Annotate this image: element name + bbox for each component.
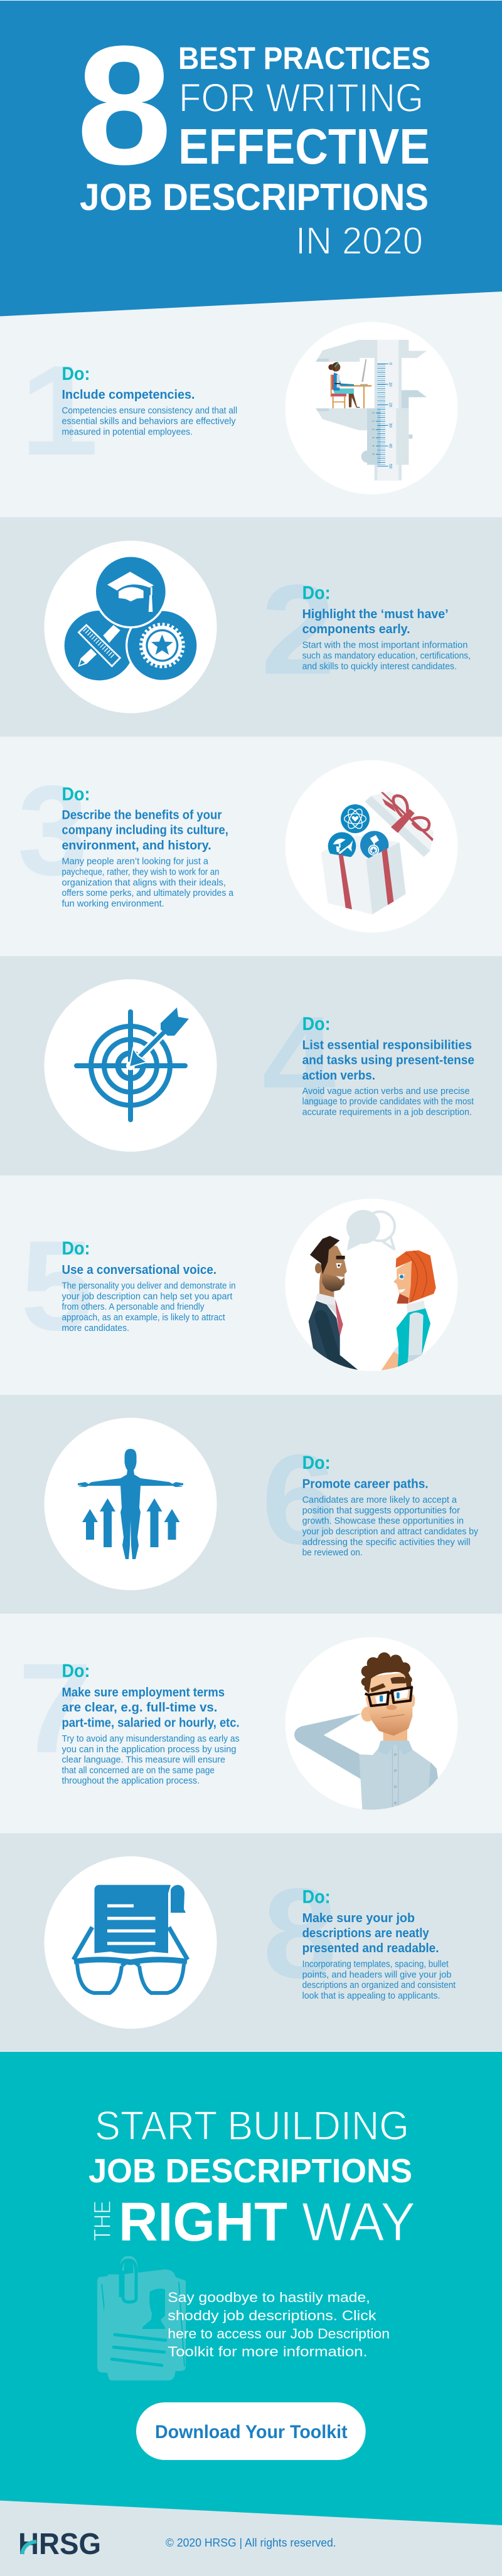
icon: white circle with person and upward arrows	[44, 1418, 217, 1590]
icon: white circle with open gift box	[285, 760, 458, 933]
panel: practice 4	[0, 956, 502, 1175]
big number 6: 6	[262, 1428, 336, 1571]
panel: practice 5	[25, 1199, 458, 1371]
heading 2: Highlight the ‘must have’	[302, 607, 449, 621]
heading 8: descriptions are neatly	[302, 1926, 429, 1940]
body 5: from others. A personable and friendly	[61, 1302, 205, 1312]
do label 7: Do:	[61, 1661, 90, 1681]
icon: white circle with caliper and woman at desk: 30	[388, 423, 392, 428]
heading 7: part-time, salaried or hourly, etc.	[61, 1715, 240, 1730]
body 2: such as mandatory education, certifications,	[302, 651, 471, 661]
body 6: position that suggests opportunities for	[302, 1506, 460, 1516]
cta line: job descriptions: JOB DESCRIPTIONS	[88, 2152, 412, 2190]
big number 5: 5	[21, 1214, 93, 1357]
footer background	[0, 2495, 502, 2576]
title	[77, 11, 430, 262]
cta line: start building: START BUILDING	[95, 2103, 409, 2148]
body 8: points, and headers will give your job	[302, 1970, 451, 1980]
body 6: your job description and attract candidates by	[302, 1527, 479, 1537]
title numeral 8: 8	[77, 11, 172, 200]
body 1: essential skills and behaviors are effectively	[61, 416, 236, 426]
body 3: Many people aren’t looking for just a	[61, 856, 209, 866]
cta body text: Toolkit for more information.	[168, 2343, 368, 2360]
body 7: Try to avoid any misunderstanding as early as	[61, 1734, 240, 1744]
body 5: more candidates.	[61, 1323, 129, 1333]
title line: in 2020: IN 2020	[296, 219, 423, 262]
heading 8	[302, 1911, 439, 1955]
cta body text: here to access our Job Description	[168, 2326, 390, 2342]
body 8	[302, 1959, 456, 2001]
title line: job descriptions: JOB DESCRIPTIONS	[80, 176, 429, 218]
cta body text: shoddy job descriptions. Click	[168, 2308, 377, 2323]
heading 4	[302, 1038, 474, 1083]
body 2	[302, 641, 471, 672]
body 7	[61, 1734, 240, 1786]
panel: call to action	[0, 2052, 502, 2525]
logo: HRSG: HRSG	[18, 2528, 101, 2561]
do label 4: Do:	[302, 1014, 331, 1034]
heading 3	[61, 808, 228, 853]
heading 1: Include competencies.	[61, 387, 195, 402]
panel: practice 6	[0, 1395, 502, 1614]
header banner background	[0, 1, 502, 316]
icon: white circle with caliper and woman at desk: 50	[388, 464, 392, 469]
big number 8: 8	[263, 1862, 337, 2005]
cta word: the (vertical): THE	[90, 2200, 116, 2241]
cta word: right: RIGHT	[119, 2192, 287, 2253]
body 7: clear language. This measure will ensure	[61, 1755, 225, 1765]
heading 8: presented and readable.	[302, 1941, 439, 1955]
heading 4: List essential responsibilities	[302, 1038, 472, 1053]
title line: for writing: FOR WRITING	[179, 75, 424, 120]
icon: white circle with thinking man in glasses	[285, 1638, 458, 1810]
heading 3: environment, and history.	[61, 838, 211, 853]
icon: white circle with caliper and woman at desk: 20	[388, 402, 392, 407]
heading 5: Use a conversational voice.	[61, 1263, 216, 1277]
body 4	[302, 1086, 474, 1117]
heading 7: Make sure employment terms	[61, 1685, 225, 1700]
icon: white circle with caliper and woman at desk: 0	[371, 412, 375, 414]
body 3	[61, 856, 234, 909]
heading 7	[61, 1685, 240, 1730]
do label 1: Do:	[61, 364, 90, 384]
icon: white circle with caliper and woman at desk: 5	[371, 453, 375, 455]
heading 3: Describe the benefits of your	[61, 808, 222, 823]
body 7: that all concerned are on the same page	[61, 1765, 215, 1775]
body 7: throughout the application process.	[61, 1776, 200, 1786]
body 3: paycheque, rather, they wish to work for an	[61, 867, 220, 877]
body 3: fun working environment.	[61, 899, 164, 909]
icon: white circle with two people talking	[285, 1199, 458, 1371]
panel: practice 7	[24, 1638, 458, 1810]
heading 3: company including its culture,	[61, 823, 228, 838]
body 3: offers some perks, and ultimately provides a	[61, 888, 234, 898]
heading 2	[302, 607, 449, 636]
heading 8: Make sure your job	[302, 1911, 415, 1925]
body 6: be reviewed on.	[302, 1548, 363, 1558]
panel: practice 8	[0, 1833, 502, 2052]
body 1	[61, 406, 237, 438]
icon: white circle with caliper and woman at desk: 1	[371, 420, 375, 422]
cta body text	[168, 2289, 390, 2360]
do label 2: Do:	[302, 582, 331, 603]
big number 7: 7	[18, 1637, 92, 1780]
do label 3: Do:	[61, 784, 90, 805]
body 3: organization that aligns with their ideals,	[61, 878, 226, 888]
heading 4: and tasks using present-tense	[302, 1053, 474, 1068]
body 8: look that is appealing to applicants.	[302, 1991, 441, 2001]
body 2: and skills to quickly interest candidates.	[302, 662, 457, 672]
body 1: Competencies ensure consistency and that all	[61, 406, 237, 416]
body 5: The personality you deliver and demonstrate in	[61, 1281, 236, 1291]
icon: white circle with document and glasses	[44, 1856, 217, 2029]
body 2: Start with the most important information	[302, 641, 467, 651]
body 5: your job description can help set you apart	[61, 1292, 232, 1302]
copyright text: © 2020 HRSG | All rights reserved.	[166, 2537, 336, 2549]
body 6: addressing the specific activities they will	[302, 1537, 471, 1547]
do label 6: Do:	[302, 1453, 331, 1473]
icon: white circle with caliper and woman at desk: 40	[388, 443, 392, 448]
body 8: descriptions an organized and consistent	[302, 1980, 456, 1990]
heading 6: Promote career paths.	[302, 1477, 429, 1491]
big number 1: 1	[20, 339, 99, 482]
button: download your toolkit	[136, 2402, 366, 2460]
body 8: Incorporating templates, spacing, bullet	[302, 1959, 449, 1969]
icon: white circle with three blue badges	[44, 540, 217, 713]
icon: white circle with caliper and woman at desk: 0	[388, 362, 392, 365]
icon: white circle with target and arrow	[44, 979, 217, 1152]
heading 7: are clear, e.g. full-time vs.	[61, 1700, 217, 1715]
body 1: measured in potential employees.	[61, 428, 193, 438]
big number 4: 4	[262, 990, 336, 1133]
title line: best practices: BEST PRACTICES	[178, 41, 430, 76]
button: download your toolkit: Download Your Toolkit	[155, 2422, 348, 2442]
icon: white circle with caliper and woman at desk	[285, 322, 458, 494]
icon: documents with paperclip	[97, 2258, 186, 2380]
body 5: approach, as an example, is likely to attract	[61, 1313, 225, 1323]
panel: practice 2	[0, 517, 502, 737]
body 6: Candidates are more likely to accept a	[302, 1495, 457, 1505]
icon: white circle with caliper and woman at desk: 3	[371, 437, 375, 439]
do label 5: Do:	[61, 1238, 90, 1259]
panel: practice 1	[0, 292, 502, 517]
title line: effective: EFFECTIVE	[178, 118, 430, 174]
icon: white circle with caliper and woman at desk: 4	[371, 445, 375, 447]
panel: practice 3	[0, 737, 502, 956]
cta body text: Say goodbye to hastily made,	[168, 2289, 370, 2305]
cta word: way: WAY	[302, 2192, 415, 2253]
body 6	[302, 1495, 479, 1558]
do label 8: Do:	[302, 1887, 331, 1908]
body 4: language to provide candidates with the most	[302, 1097, 474, 1107]
icon: white circle with caliper and woman at desk: 10	[388, 382, 392, 387]
big number 3: 3	[18, 759, 88, 902]
body 4: Avoid vague action verbs and use precise	[302, 1086, 469, 1096]
heading 4: action verbs.	[302, 1068, 375, 1083]
big number 2: 2	[261, 559, 335, 702]
heading 2: components early.	[302, 622, 410, 636]
body 6: growth. Showcase these opportunities in	[302, 1517, 464, 1527]
body 4: accurate requirements in a job description.	[302, 1107, 472, 1117]
body 5	[61, 1281, 236, 1333]
body 7: you can in the application process by using	[61, 1745, 236, 1755]
icon: white circle with caliper and woman at desk: 2	[371, 429, 375, 431]
